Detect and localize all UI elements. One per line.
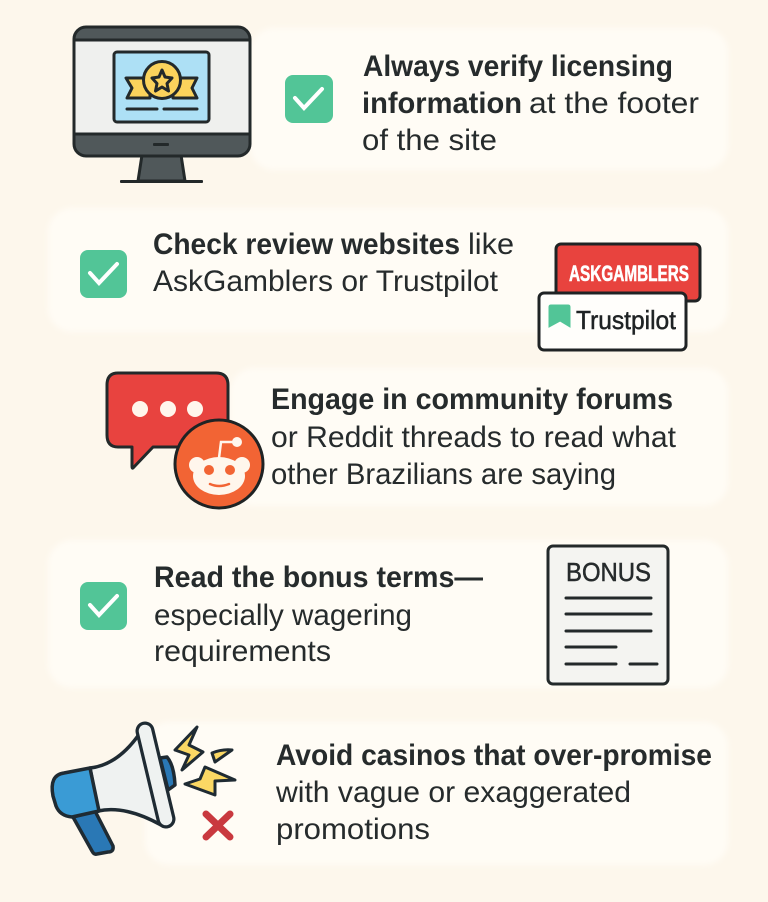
panel: community forums: [107, 368, 728, 508]
text: verify licensing: information: [362, 87, 522, 120]
logo: AskGamblers: ASKGAMBLERS: [569, 261, 689, 286]
text: review websites: like: [468, 228, 514, 261]
text: review websites: AskGamblers or Trustpilot: [153, 265, 499, 298]
panel: bonus terms: [48, 540, 728, 688]
text: bonus terms: especially wagering: [154, 599, 412, 632]
text: bonus terms: requirements: [154, 635, 331, 668]
text: avoid over-promising: [275, 739, 712, 846]
panel: avoid over-promising: [52, 722, 728, 865]
text: avoid over-promising: Avoid casinos that over-promise: [276, 739, 712, 772]
text: community forums: other Brazilians are saying: [271, 458, 616, 491]
text: bonus terms: Read the bonus terms—: [154, 561, 483, 594]
text: verify licensing: Always verify licensing: [363, 50, 673, 83]
text: bonus terms: [154, 561, 483, 668]
icon: red cross: [206, 814, 230, 837]
icon: chat bubble: [107, 373, 228, 468]
icon: bonus document: [548, 546, 668, 684]
icon: green check: [80, 582, 127, 630]
logo: Trustpilot: [539, 293, 686, 350]
text: verify licensing: at the footer: [529, 87, 699, 120]
icon: monitor with licence badge: [74, 27, 250, 183]
text: community forums: or Reddit threads to read what: [271, 421, 677, 454]
icon: Reddit logo: [175, 420, 263, 508]
text: avoid over-promising: promotions: [276, 813, 430, 846]
text: verify licensing: [362, 50, 699, 157]
panel: review websites: [48, 208, 728, 350]
logo: Trustpilot: Trustpilot: [576, 305, 677, 335]
icon: green check: [285, 75, 333, 123]
text: verify licensing: of the site: [362, 124, 497, 157]
text: avoid over-promising: with vague or exaggerated: [275, 776, 631, 809]
icon: lightning bolts: [175, 727, 235, 795]
text: community forums: [271, 383, 677, 491]
panel: verify licensing: [74, 27, 728, 183]
icon: bonus document: BONUS: [566, 557, 651, 587]
text: community forums: Engage in community forums: [271, 383, 673, 416]
text: review websites: Check review websites: [153, 228, 460, 261]
logo: AskGamblers: [556, 244, 700, 301]
icon: megaphone: [52, 731, 175, 854]
text: review websites: [153, 228, 514, 298]
icon: green check: [80, 250, 127, 298]
